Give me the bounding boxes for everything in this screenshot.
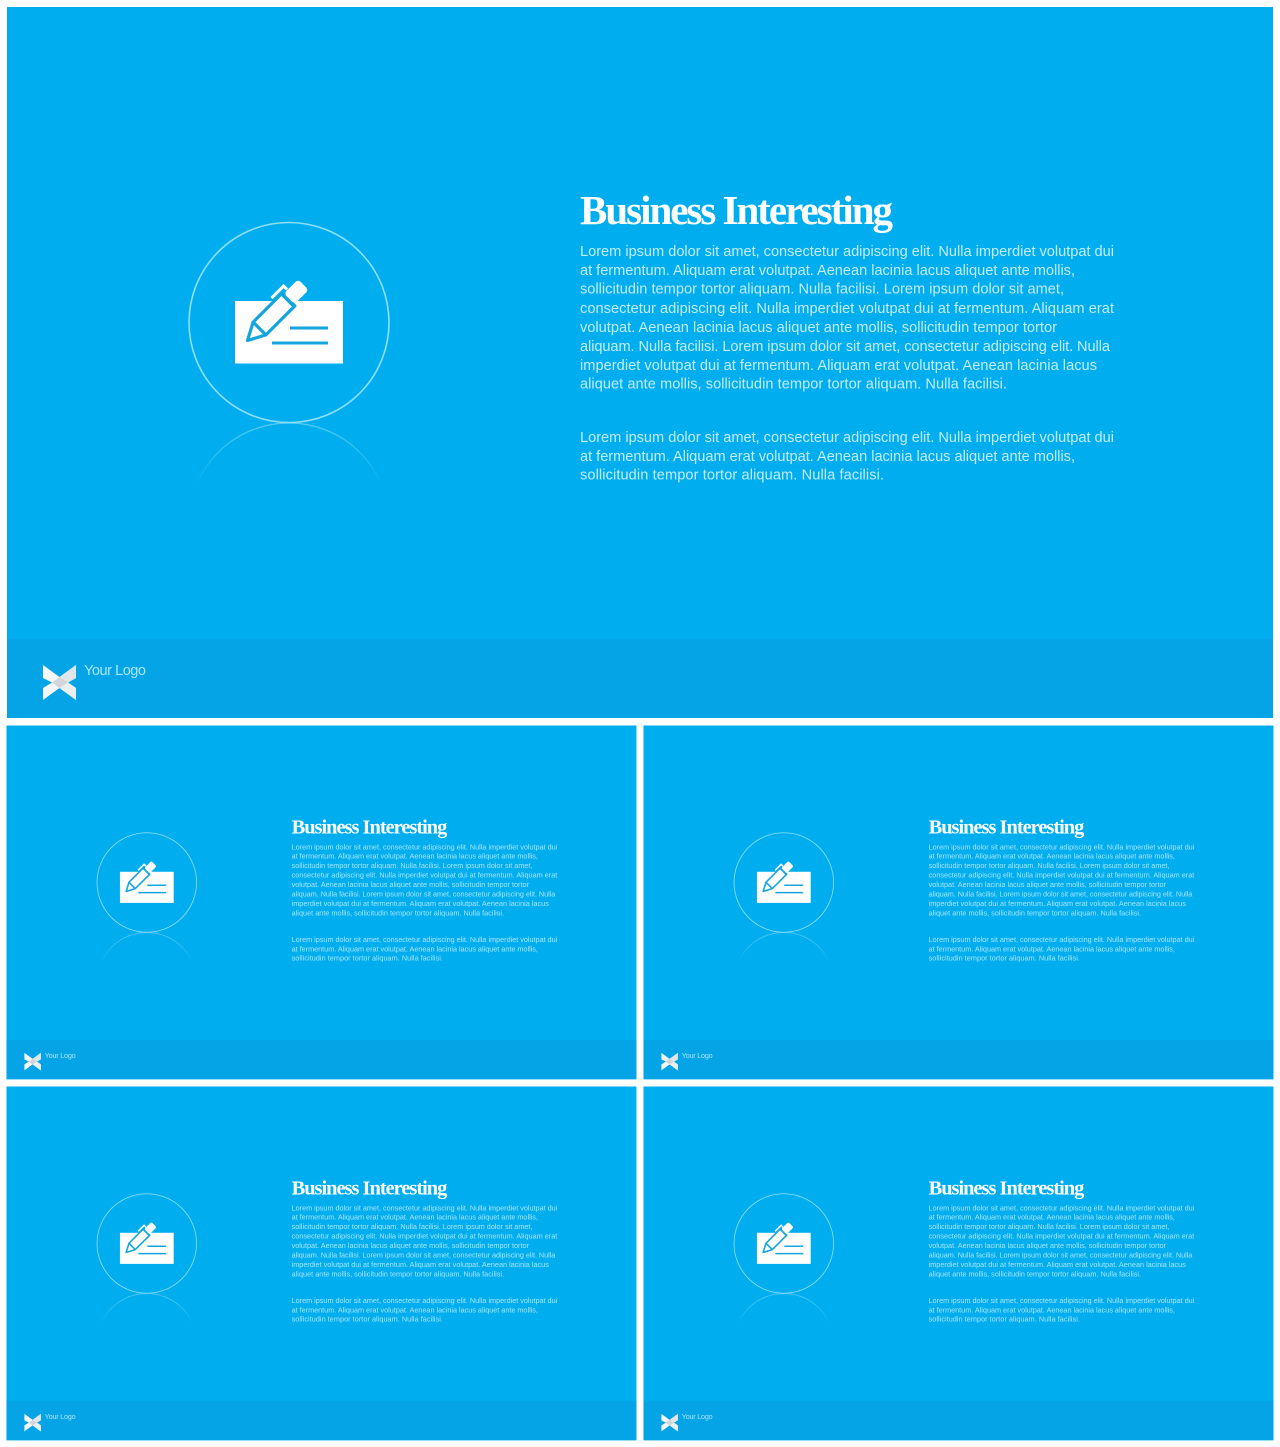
icon: ring reflection: [102, 1294, 191, 1320]
body text: paragraph 1: volutpat. Aenean lacinia lacus aliquet ante mollis, sollicitudin tempor tortor: [929, 1241, 1167, 1250]
panel: small slide bottom right: [643, 1086, 1273, 1440]
body text: paragraph 2: Lorem ipsum dolor sit amet, consectetur adipiscing elit. Nulla imperdiet volutpat dui: [929, 1296, 1195, 1305]
body text: paragraph 1: aliquet ante mollis, sollicitudin tempor tortor aliquam. Nulla facilisi.: [929, 908, 1141, 917]
body text: paragraph 1: consectetur adipiscing elit. Nulla imperdiet volutpat dui at fermentum. Aliquam erat: [580, 301, 1114, 317]
slide background: [6, 1086, 636, 1440]
title: Business Interesting: [292, 816, 447, 838]
icon: logo mark: [43, 665, 76, 700]
icon: circle ring: [97, 1194, 197, 1293]
slide background: [643, 725, 1273, 1079]
body text: paragraph 1: imperdiet volutpat dui at fermentum. Aliquam erat volutpat. Aenean lacinia lacus: [929, 899, 1186, 908]
icon: ring reflection: [200, 423, 378, 478]
slide background: [6, 725, 636, 1079]
body text: paragraph 1: consectetur adipiscing elit. Nulla imperdiet volutpat dui at fermentum. Aliquam erat: [292, 871, 557, 880]
logo text: Your Logo: [682, 1412, 713, 1421]
body text: paragraph 1: aliquam. Nulla facilisi. Lorem ipsum dolor sit amet, consectetur adipiscing elit. Nulla: [292, 890, 556, 899]
icon: logo mark: [24, 1053, 41, 1070]
slide background: [7, 7, 1273, 718]
body text: paragraph 1: sollicitudin tempor tortor aliquam. Nulla facilisi. Lorem ipsum dolor sit amet,: [929, 861, 1169, 870]
icon: logo mark: [661, 1053, 678, 1070]
title: Business Interesting: [580, 187, 894, 233]
body text: paragraph 1: volutpat. Aenean lacinia lacus aliquet ante mollis, sollicitudin tempor tortor: [292, 880, 530, 889]
body text: paragraph 2: sollicitudin tempor tortor aliquam. Nulla facilisi.: [292, 1315, 443, 1324]
body text: paragraph 1: Lorem ipsum dolor sit amet, consectetur adipiscing elit. Nulla imperdiet volutpat dui: [929, 842, 1195, 851]
body text: paragraph 2: [929, 1296, 1195, 1324]
body text: paragraph 1: Lorem ipsum dolor sit amet, consectetur adipiscing elit. Nulla imperdiet volutpat dui: [292, 842, 558, 851]
body text: paragraph 1: [292, 1203, 558, 1278]
body text: paragraph 1: consectetur adipiscing elit. Nulla imperdiet volutpat dui at fermentum. Aliquam erat: [292, 1232, 557, 1241]
body text: paragraph 1: aliquam. Nulla facilisi. Lorem ipsum dolor sit amet, consectetur adipiscing elit. Nulla: [292, 1251, 556, 1260]
body text: paragraph 1: consectetur adipiscing elit. Nulla imperdiet volutpat dui at fermentum. Aliquam erat: [929, 1232, 1194, 1241]
footer band: [643, 1040, 1273, 1079]
footer band: [6, 1401, 636, 1440]
body text: paragraph 1: sollicitudin tempor tortor aliquam. Nulla facilisi. Lorem ipsum dolor sit amet,: [580, 282, 1064, 298]
body text: paragraph 2: at fermentum. Aliquam erat volutpat. Aenean lacinia lacus aliquet ante mollis,: [292, 944, 538, 953]
body text: paragraph 1: Lorem ipsum dolor sit amet, consectetur adipiscing elit. Nulla imperdiet volutpat dui: [580, 244, 1114, 260]
icon: ring reflection: [102, 932, 191, 960]
panel: small slide bottom left: [6, 1086, 636, 1440]
title: Business Interesting: [929, 1177, 1084, 1199]
body text: paragraph 1: sollicitudin tempor tortor aliquam. Nulla facilisi. Lorem ipsum dolor sit amet,: [292, 1222, 532, 1231]
body text: paragraph 1: aliquam. Nulla facilisi. Lorem ipsum dolor sit amet, consectetur adipiscing elit. Nulla: [929, 890, 1193, 899]
panel: small slide top left: [6, 725, 636, 1079]
body text: paragraph 1: aliquet ante mollis, sollicitudin tempor tortor aliquam. Nulla facilisi.: [580, 376, 1007, 392]
icon: pen on card: [120, 1220, 174, 1264]
body text: paragraph 2: Lorem ipsum dolor sit amet, consectetur adipiscing elit. Nulla imperdiet volutpat dui: [929, 935, 1195, 944]
icon: pen on card: [235, 275, 343, 364]
body text: paragraph 1: sollicitudin tempor tortor aliquam. Nulla facilisi. Lorem ipsum dolor sit amet,: [929, 1222, 1169, 1231]
body text: paragraph 2: sollicitudin tempor tortor aliquam. Nulla facilisi.: [292, 954, 443, 963]
body text: paragraph 2: [292, 935, 558, 963]
body text: paragraph 1: Lorem ipsum dolor sit amet, consectetur adipiscing elit. Nulla imperdiet volutpat dui: [292, 1203, 558, 1212]
body text: paragraph 1: imperdiet volutpat dui at fermentum. Aliquam erat volutpat. Aenean lacinia lacus: [292, 1260, 549, 1269]
logo text: Your Logo: [45, 1051, 76, 1060]
logo text: Your Logo: [682, 1051, 713, 1060]
body text: paragraph 1: aliquam. Nulla facilisi. Lorem ipsum dolor sit amet, consectetur adipiscing elit. Nulla: [929, 1251, 1193, 1260]
body text: paragraph 2: at fermentum. Aliquam erat volutpat. Aenean lacinia lacus aliquet ante mollis,: [929, 944, 1175, 953]
icon: pen on card: [120, 859, 174, 903]
body text: paragraph 1: imperdiet volutpat dui at fermentum. Aliquam erat volutpat. Aenean lacinia lacus: [580, 358, 1097, 374]
body text: paragraph 2: sollicitudin tempor tortor aliquam. Nulla facilisi.: [580, 468, 884, 484]
body text: paragraph 1: at fermentum. Aliquam erat volutpat. Aenean lacinia lacus aliquet ante mollis,: [929, 1213, 1175, 1222]
footer band: [7, 639, 1273, 718]
title: Business Interesting: [292, 1177, 447, 1199]
icon: circle ring: [734, 1194, 834, 1293]
icon: logo mark: [24, 1414, 41, 1431]
icon: logo mark: [661, 1414, 678, 1431]
body text: paragraph 2: at fermentum. Aliquam erat volutpat. Aenean lacinia lacus aliquet ante mollis,: [580, 449, 1075, 465]
body text: paragraph 2: [292, 1296, 558, 1324]
body text: paragraph 1: imperdiet volutpat dui at fermentum. Aliquam erat volutpat. Aenean lacinia lacus: [292, 899, 549, 908]
icon: ring reflection: [740, 1294, 828, 1320]
footer band: [643, 1401, 1273, 1440]
logo text: Your Logo: [84, 663, 146, 679]
body text: paragraph 2: [929, 935, 1195, 963]
icon: pen on card: [757, 1220, 811, 1264]
title: Business Interesting: [929, 816, 1084, 838]
body text: paragraph 2: at fermentum. Aliquam erat volutpat. Aenean lacinia lacus aliquet ante mollis,: [929, 1305, 1175, 1314]
body text: paragraph 1: [929, 1203, 1195, 1278]
body text: paragraph 1: sollicitudin tempor tortor aliquam. Nulla facilisi. Lorem ipsum dolor sit amet,: [292, 861, 532, 870]
body text: paragraph 1: at fermentum. Aliquam erat volutpat. Aenean lacinia lacus aliquet ante mollis,: [929, 852, 1175, 861]
body text: paragraph 2: Lorem ipsum dolor sit amet, consectetur adipiscing elit. Nulla imperdiet volutpat dui: [292, 1296, 558, 1305]
icon: pen on card: [757, 859, 811, 903]
body text: paragraph 1: aliquet ante mollis, sollicitudin tempor tortor aliquam. Nulla facilisi.: [292, 908, 504, 917]
body text: paragraph 1: volutpat. Aenean lacinia lacus aliquet ante mollis, sollicitudin tempor tortor: [580, 320, 1057, 336]
body text: paragraph 2: sollicitudin tempor tortor aliquam. Nulla facilisi.: [929, 954, 1080, 963]
body text: paragraph 1: imperdiet volutpat dui at fermentum. Aliquam erat volutpat. Aenean lacinia lacus: [929, 1260, 1186, 1269]
body text: paragraph 1: at fermentum. Aliquam erat volutpat. Aenean lacinia lacus aliquet ante mollis,: [292, 1213, 538, 1222]
body text: paragraph 1: [929, 842, 1195, 917]
body text: paragraph 1: aliquam. Nulla facilisi. Lorem ipsum dolor sit amet, consectetur adipiscing elit. Nulla: [580, 339, 1111, 355]
body text: paragraph 1: volutpat. Aenean lacinia lacus aliquet ante mollis, sollicitudin tempor tortor: [929, 880, 1167, 889]
body text: paragraph 1: [580, 244, 1114, 392]
body text: paragraph 1: aliquet ante mollis, sollicitudin tempor tortor aliquam. Nulla facilisi.: [929, 1269, 1141, 1278]
logo text: Your Logo: [45, 1412, 76, 1421]
body text: paragraph 1: Lorem ipsum dolor sit amet, consectetur adipiscing elit. Nulla imperdiet volutpat dui: [929, 1203, 1195, 1212]
slide background: [643, 1086, 1273, 1440]
body text: paragraph 1: consectetur adipiscing elit. Nulla imperdiet volutpat dui at fermentum. Aliquam erat: [929, 871, 1194, 880]
body text: paragraph 2: Lorem ipsum dolor sit amet, consectetur adipiscing elit. Nulla imperdiet volutpat dui: [580, 430, 1114, 446]
body text: paragraph 2: Lorem ipsum dolor sit amet, consectetur adipiscing elit. Nulla imperdiet volutpat dui: [292, 935, 558, 944]
body text: paragraph 1: at fermentum. Aliquam erat volutpat. Aenean lacinia lacus aliquet ante mollis,: [580, 263, 1075, 279]
body text: paragraph 2: sollicitudin tempor tortor aliquam. Nulla facilisi.: [929, 1315, 1080, 1324]
body text: paragraph 1: [292, 842, 558, 917]
body text: paragraph 2: at fermentum. Aliquam erat volutpat. Aenean lacinia lacus aliquet ante mollis,: [292, 1305, 538, 1314]
icon: circle ring: [189, 222, 389, 422]
body text: paragraph 1: aliquet ante mollis, sollicitudin tempor tortor aliquam. Nulla facilisi.: [292, 1269, 504, 1278]
body text: paragraph 2: [580, 430, 1114, 484]
panel: small slide top right: [643, 725, 1273, 1079]
icon: circle ring: [97, 833, 197, 932]
panel: large slide: [7, 7, 1273, 718]
body text: paragraph 1: at fermentum. Aliquam erat volutpat. Aenean lacinia lacus aliquet ante mollis,: [292, 852, 538, 861]
body text: paragraph 1: volutpat. Aenean lacinia lacus aliquet ante mollis, sollicitudin tempor tortor: [292, 1241, 530, 1250]
icon: ring reflection: [740, 932, 828, 960]
footer band: [6, 1040, 636, 1079]
icon: circle ring: [734, 833, 834, 932]
